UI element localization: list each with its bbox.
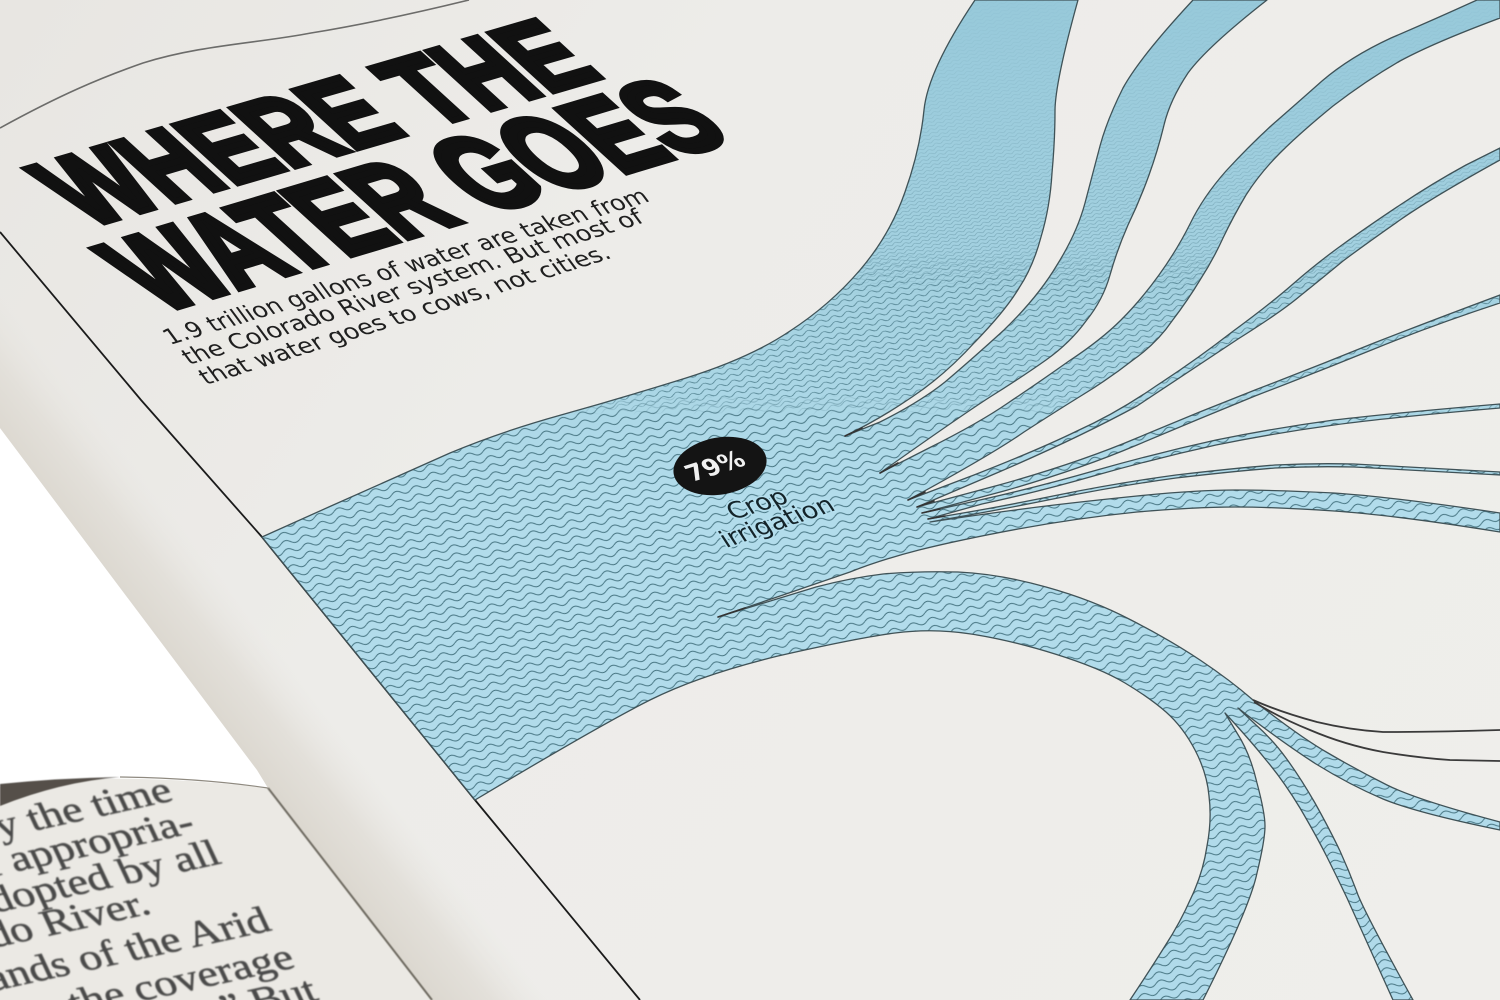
page frame lines	[0, 0, 640, 1000]
percent badge	[669, 430, 771, 502]
book page body text	[0, 770, 324, 1000]
title: WATER GOES	[71, 58, 756, 332]
callout: 79% crop irrigation	[669, 430, 840, 553]
label: irrigation	[713, 490, 840, 553]
dark gap tips between flows	[718, 428, 945, 617]
intro text	[157, 184, 655, 390]
intro text: the Colorado River system. But most of	[176, 205, 650, 370]
intro text: 1.9 trillion gallons of water are taken from	[157, 184, 655, 350]
label: Crop	[720, 482, 794, 525]
thin black flows, lower right	[1253, 700, 1500, 761]
open book page, lower left	[0, 770, 432, 1000]
percent badge: 79%	[679, 445, 751, 487]
intro text: that water goes to cows, not cities.	[193, 241, 617, 390]
